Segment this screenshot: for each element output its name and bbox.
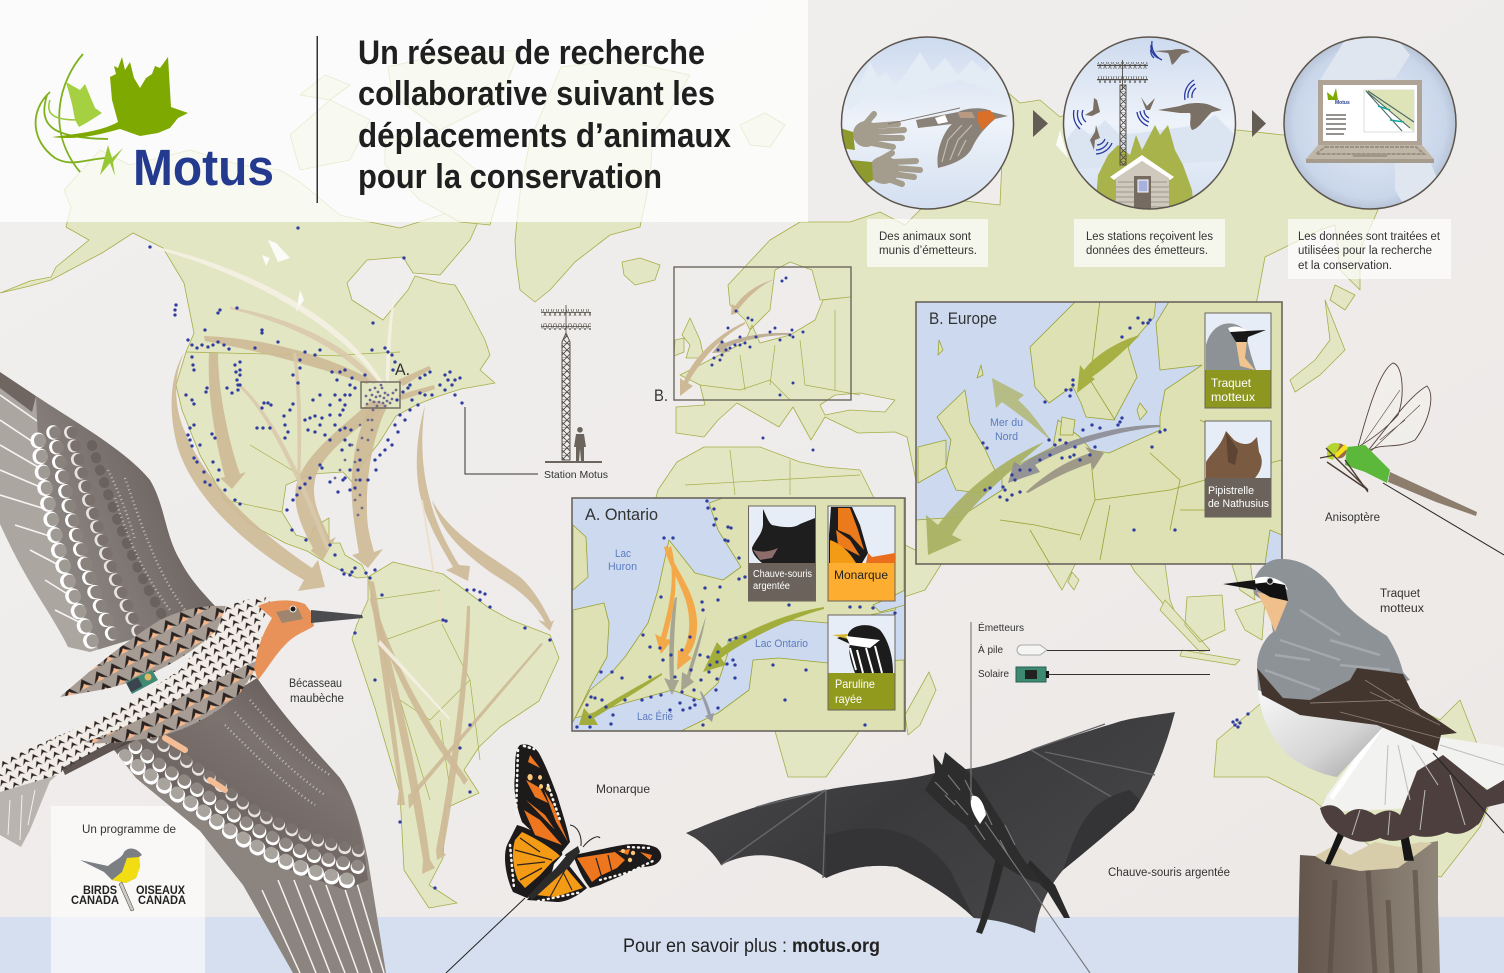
orange arrow right <box>664 546 697 670</box>
text lines on screen <box>1326 115 1346 134</box>
circle 1: tagging <box>840 37 1020 209</box>
south shore land <box>681 658 904 731</box>
eye mask <box>1253 582 1288 601</box>
birds canada logo <box>71 849 186 911</box>
arrow traquet to south <box>1077 335 1140 393</box>
warbler <box>837 625 893 673</box>
programme box <box>51 806 205 973</box>
migration arrows on world map <box>153 246 554 874</box>
greenland land <box>515 60 690 302</box>
traquet head <box>1206 323 1256 370</box>
europe inset continent <box>916 300 1290 570</box>
label mer du nord <box>990 417 1023 443</box>
feather row 1 white edge <box>38 440 95 650</box>
door <box>1134 176 1151 212</box>
tag on bat <box>971 796 986 824</box>
person silhouette <box>574 427 586 461</box>
europe detail on map <box>674 267 851 450</box>
circle 3: data <box>1284 36 1456 215</box>
grey arrow b <box>681 616 706 691</box>
lake labels <box>608 548 808 723</box>
europe arrows <box>731 279 775 315</box>
arrow bat brown <box>1026 447 1104 493</box>
panel monarque: Monarque <box>834 570 888 582</box>
hindwing left <box>505 825 563 898</box>
dragonfly <box>1320 363 1504 555</box>
europe inset arrows <box>926 335 1160 555</box>
label traquet: motteux <box>1380 603 1424 615</box>
hindwing dots <box>510 845 550 897</box>
thick band west to box A <box>204 336 372 384</box>
red knot bird <box>0 360 400 973</box>
caption 1 <box>867 219 988 267</box>
label traquet <box>1380 588 1424 615</box>
laptop screen <box>1318 80 1422 145</box>
panel traquet: motteux <box>1211 390 1255 404</box>
heading emetteurs: Émetteurs <box>978 621 1024 634</box>
step captions <box>867 219 1451 279</box>
europe inset borders <box>1000 300 1282 564</box>
antenna arrays <box>541 309 591 316</box>
circle 2: stations <box>1062 37 1240 212</box>
body and tag <box>528 846 580 900</box>
dragonfly leader line <box>1383 483 1504 555</box>
label monarque: Monarque <box>596 784 650 796</box>
arrow to mexico <box>209 353 246 489</box>
leader line <box>1433 753 1504 833</box>
lower rows <box>125 757 360 884</box>
title: déplacements d’animaux <box>358 117 731 155</box>
label anisoptere: Anisoptère <box>1325 512 1380 524</box>
title: pour la conservation <box>358 158 662 196</box>
tail dark tips <box>1320 755 1504 842</box>
label becasseau <box>289 678 344 705</box>
europe inset dots <box>983 318 1175 530</box>
step captions: utilisées pour la recherche <box>1298 245 1432 257</box>
bat furred body <box>925 752 1045 885</box>
islands of asia and oceania <box>905 285 1495 877</box>
footer text: Pour en savoir plus : motus.org <box>623 936 880 957</box>
wing fingers <box>721 724 1155 878</box>
footer band <box>0 917 1504 973</box>
panel pipistrelle: Pipistrelle <box>1208 485 1254 497</box>
circle 3: data: Motus <box>1335 100 1350 106</box>
tail white fan <box>1320 727 1504 812</box>
leader line <box>446 898 525 973</box>
flying birds <box>1154 49 1190 65</box>
short arrows to northeast <box>398 366 431 386</box>
dense dots in box A <box>335 385 396 515</box>
dragonfly wings <box>1358 363 1431 452</box>
title: Un réseau de recherche <box>358 34 705 72</box>
header divider <box>316 36 318 203</box>
birds canada logo: BIRDS <box>83 883 117 897</box>
europe inset ireland <box>918 440 946 483</box>
tail feathers <box>0 775 57 847</box>
step captions: et la conservation. <box>1298 260 1392 272</box>
panel traquet: Traquet <box>1211 376 1252 390</box>
forewing right <box>573 844 661 888</box>
programme content: Un programme de <box>82 824 176 836</box>
grey arrow a <box>664 597 679 695</box>
solar tag icon <box>1016 667 1046 682</box>
programme content <box>71 824 186 911</box>
inset A heading: A. Ontario <box>585 506 658 524</box>
hindwing lower right <box>527 863 587 902</box>
motus wordmark: Motus <box>133 139 274 196</box>
thin pale band from alaska <box>153 246 384 385</box>
tail and body speckle <box>0 607 265 792</box>
panel pipistrelle <box>1205 421 1271 517</box>
lower primary lines <box>262 880 384 973</box>
mini logo <box>1327 88 1338 100</box>
covert base <box>36 396 216 652</box>
battery tag icon <box>1017 645 1047 655</box>
europe dots <box>712 278 813 450</box>
tower and antennas <box>1097 62 1148 69</box>
label mer du nord: Mer du <box>990 417 1023 429</box>
forewing white dots <box>516 746 560 820</box>
africa land <box>650 447 942 777</box>
upper wing <box>0 372 215 652</box>
label chauve-souris: Chauve-souris argentée <box>1108 867 1230 879</box>
inland white lakes <box>262 130 1120 312</box>
station leader line <box>465 407 538 474</box>
feather row 1 <box>40 440 97 650</box>
label mer du nord: Nord <box>995 431 1018 443</box>
label traquet: Traquet <box>1380 588 1421 600</box>
arrow bat grey <box>1008 425 1160 483</box>
step captions: Les données sont traitées et <box>1298 231 1441 243</box>
fence post <box>1298 841 1440 973</box>
arrow 1 <box>1033 110 1048 137</box>
globe land <box>1320 38 1436 202</box>
antenna wire <box>888 108 960 124</box>
birds canada logo: OISEAUX <box>136 883 185 897</box>
panel pipistrelle: de Nathusius <box>1208 498 1269 510</box>
bat legs <box>976 850 1070 934</box>
panel paruline: rayée <box>835 692 862 706</box>
lower scapular panel <box>84 658 263 743</box>
distant trees <box>866 52 996 74</box>
dragonfly thorax <box>1345 445 1390 483</box>
transmitter on back <box>126 670 158 694</box>
green trees <box>1095 125 1194 210</box>
inset B heading: B. Europe <box>929 310 997 328</box>
bat wings <box>686 712 1175 933</box>
orange arrow left <box>655 546 675 654</box>
green arrow west <box>579 673 662 725</box>
laptop base <box>1306 145 1434 159</box>
inset A: ontario <box>572 498 905 731</box>
label solaire: Solaire <box>978 668 1009 680</box>
step captions: munis d’émetteurs. <box>879 245 977 257</box>
panel chauve-souris: argentée <box>753 581 790 592</box>
bird bill <box>1223 580 1256 590</box>
step captions: Des animaux sont <box>879 231 972 243</box>
arrow big southwest <box>926 442 1044 555</box>
michigan land <box>573 603 609 722</box>
station dots world <box>150 228 1248 888</box>
label station motus: Station Motus <box>544 469 608 481</box>
ontario dots <box>577 501 895 727</box>
small grey arrow <box>700 691 714 722</box>
pale marks on lower wing <box>165 738 225 790</box>
house roof <box>1110 155 1174 180</box>
panel chauve-souris: Chauve-souris <box>753 569 812 580</box>
bill <box>311 610 363 623</box>
station motus tower <box>541 305 602 463</box>
wing membrane fold <box>826 828 974 918</box>
wheatear bird and post <box>1223 559 1504 973</box>
arrow to central america left <box>172 353 325 591</box>
distant trees <box>1066 115 1234 158</box>
dragonfly legs <box>1320 448 1368 492</box>
thin west lines <box>238 384 330 550</box>
bat antenna and emitter line <box>971 622 1090 973</box>
panel traquet <box>1205 313 1271 408</box>
lake labels: Lac <box>615 548 631 560</box>
lake labels: Lac Érié <box>637 710 673 723</box>
bat head <box>1206 431 1262 478</box>
label B: B. <box>654 386 668 405</box>
antennae <box>570 825 600 847</box>
signal waves <box>1074 41 1196 154</box>
upper hand <box>853 114 904 147</box>
eurasia land <box>676 90 1378 625</box>
monarch wing <box>829 507 868 563</box>
logo <box>36 54 274 196</box>
box B on map <box>674 267 851 400</box>
label becasseau: maubèche <box>290 693 344 705</box>
dark tail band <box>62 720 180 775</box>
mini chart <box>1364 90 1414 132</box>
panel paruline <box>828 615 895 710</box>
arrows through south america <box>368 580 405 805</box>
small bird <box>66 82 102 127</box>
britain and ireland <box>674 318 704 358</box>
forewing left <box>514 744 570 852</box>
chest speckle <box>218 597 275 645</box>
birds canada logo: CANADA <box>71 893 119 907</box>
legs <box>1326 815 1413 864</box>
birds canada logo: CANADA <box>138 893 186 907</box>
lower covert base <box>114 678 368 890</box>
inset B: europe <box>916 300 1290 570</box>
step captions: Les stations reçoivent les <box>1086 231 1213 243</box>
ontario main land <box>575 498 904 718</box>
black sea <box>820 393 895 415</box>
orange throat <box>1257 592 1288 632</box>
thin band to box A <box>230 307 378 384</box>
thick band to central america <box>295 400 384 560</box>
small green feather <box>100 145 123 176</box>
belly <box>1258 690 1385 777</box>
arrow 2 <box>1252 110 1266 137</box>
bird <box>916 108 1008 168</box>
title: collaborative suivant les <box>358 75 715 113</box>
transmitters legend <box>978 621 1210 682</box>
north america land <box>0 150 495 578</box>
europe inset scandinavia <box>1030 300 1156 420</box>
panel monarque <box>828 506 895 601</box>
lower hand <box>869 153 920 184</box>
label a pile: À pile <box>978 643 1003 656</box>
post top <box>1315 842 1432 871</box>
lower wing <box>114 678 386 973</box>
lake labels: Huron <box>608 561 637 573</box>
green arrow east <box>703 607 824 672</box>
ontario arrows <box>579 546 824 725</box>
south america land <box>352 562 559 908</box>
wing dark <box>1257 668 1457 751</box>
main bird <box>52 57 188 138</box>
orange head and breast <box>254 600 314 680</box>
step captions: données des émetteurs. <box>1086 245 1208 257</box>
box A on map <box>361 382 400 408</box>
white brow <box>1252 577 1288 590</box>
house wall <box>1116 161 1169 212</box>
thick band to colombia <box>352 400 388 568</box>
upper scapular panel <box>60 606 226 697</box>
europe inset britain <box>937 390 998 493</box>
primary feather lines <box>0 394 78 622</box>
dragonfly head <box>1332 444 1346 458</box>
forewing orange cells <box>524 755 568 845</box>
lake labels: Lac Ontario <box>755 638 808 650</box>
arctic islands <box>290 50 785 285</box>
panel paruline: Paruline <box>835 677 875 691</box>
bat <box>686 712 1175 934</box>
monarch butterfly <box>446 744 661 973</box>
header overlay <box>0 0 808 222</box>
title <box>358 34 731 196</box>
silver-haired bat head <box>752 509 815 563</box>
dragonfly tail <box>1388 472 1477 516</box>
arrows to south america east <box>417 405 470 581</box>
caption 2 <box>1074 219 1225 267</box>
arrow north sea <box>992 378 1053 443</box>
label becasseau: Bécasseau <box>289 678 342 690</box>
logo swirl <box>36 54 108 172</box>
label A: A. <box>395 360 410 379</box>
caption 3 <box>1288 219 1451 279</box>
grey back and head <box>1252 559 1410 708</box>
country borders <box>186 310 860 800</box>
panel chauve-souris <box>748 506 816 601</box>
